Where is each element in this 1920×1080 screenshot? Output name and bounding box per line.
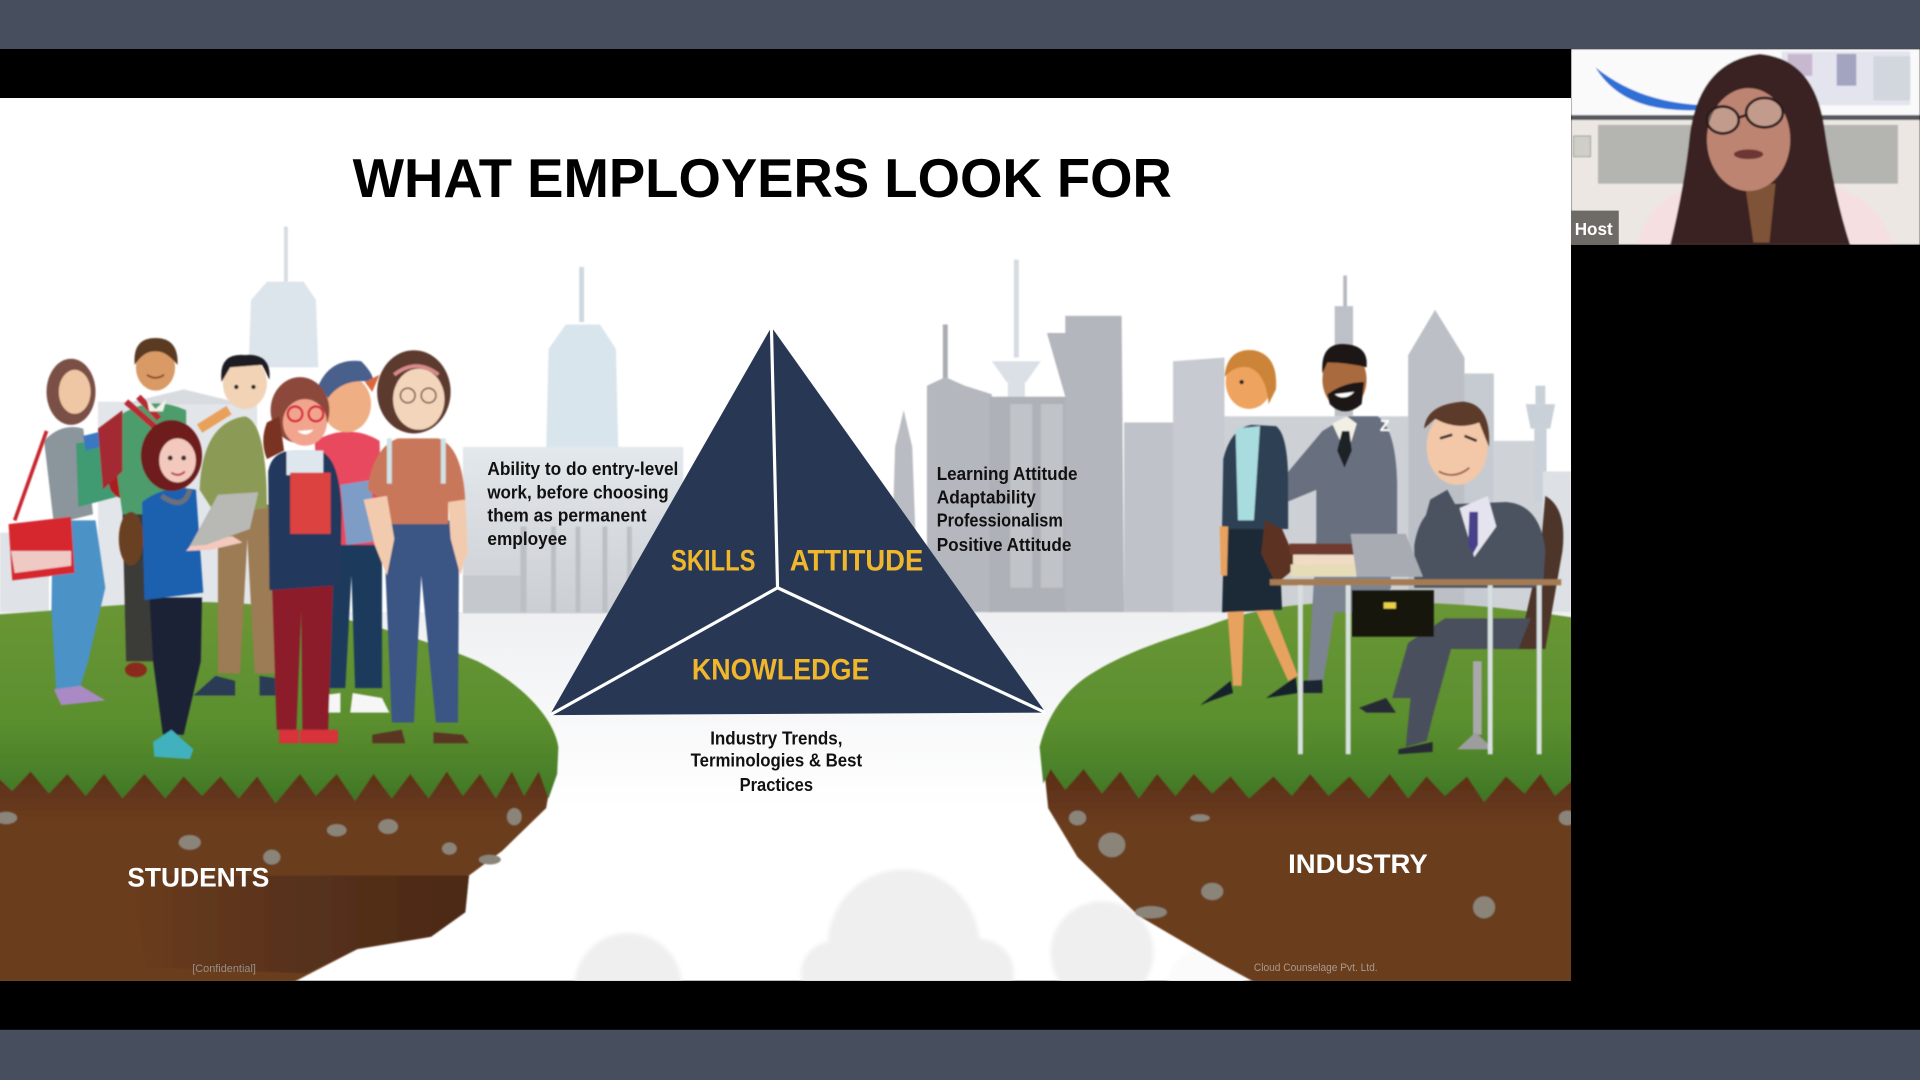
snore letters: Z: [1380, 418, 1390, 435]
triangle diagram: [550, 327, 1046, 715]
webcam panel: host: [1571, 49, 1920, 245]
label: skills: SKILLS: [671, 545, 756, 578]
student: boy in olive sweater: [193, 354, 276, 696]
soil left: [0, 770, 549, 981]
skyline left: [0, 227, 683, 613]
soil right: [1043, 759, 1580, 984]
worker: woman with handbag: [1200, 350, 1298, 705]
text: knowledge description: Industry Trends,: [710, 727, 842, 748]
student: girl with glasses and red trousers: [263, 377, 342, 743]
student: girl with red bag: [8, 358, 122, 706]
label: host: Host: [1575, 219, 1613, 239]
snore letters: [1380, 390, 1405, 435]
label: attitude: ATTITUDE: [790, 545, 923, 578]
text: attitude description: Positive Attitude: [937, 534, 1071, 555]
wall monitor: [1571, 49, 1920, 120]
student: boy in green shirt: [98, 338, 186, 677]
icon: laptop: [190, 492, 258, 546]
icon: briefcase: [1352, 590, 1434, 637]
icon: stack of books: [1289, 544, 1357, 577]
text: skills description: work, before choosing: [486, 481, 669, 502]
host mouth: [1734, 149, 1763, 159]
desk: [1270, 579, 1561, 754]
label: industry: INDUSTRY: [1288, 849, 1428, 879]
grass right: [1040, 602, 1580, 802]
text: attitude description: [937, 463, 1078, 555]
student: boy in cap: [315, 361, 389, 713]
text: skills description: [486, 458, 678, 549]
text: skills description: employee: [487, 528, 567, 549]
host glasses: [1707, 98, 1783, 133]
wall: [1571, 49, 1920, 245]
text: knowledge description: Terminologies & Best: [691, 750, 862, 771]
icon: laptop on desk: [1351, 534, 1423, 577]
island: industry: [1040, 602, 1580, 984]
student: girl in blue shirt: [119, 420, 242, 759]
snore letters: Z: [1393, 390, 1405, 411]
worker: seated man with head on hand: [1359, 402, 1563, 754]
footer: confidential: [Confidential]: [192, 963, 256, 975]
group of students: [9, 338, 469, 759]
text: knowledge description: [691, 727, 862, 795]
label: students: STUDENTS: [127, 863, 269, 893]
host neck: [1745, 184, 1776, 242]
triangle dividers: [550, 327, 1046, 715]
text: attitude description: Adaptability: [937, 486, 1037, 507]
text: skills description: them as permanent: [487, 505, 647, 526]
island: students: [0, 602, 558, 984]
text: knowledge description: Practices: [740, 774, 813, 795]
label: host: [1571, 211, 1619, 245]
label: knowledge: KNOWLEDGE: [692, 654, 869, 687]
host hair: [1670, 54, 1850, 245]
footer: company: Cloud Counselage Pvt. Ltd.: [1254, 962, 1378, 974]
group of office workers: [1200, 344, 1563, 754]
worker: bearded man in grey suit: [1287, 343, 1398, 694]
host sweater: [1637, 187, 1893, 245]
stones left: [0, 808, 522, 864]
grass left: [0, 602, 558, 803]
text: attitude description: Professionalism: [937, 510, 1063, 531]
skyline right: [890, 260, 1571, 612]
text: attitude description: Learning Attitude: [937, 463, 1078, 484]
stones right: [1069, 811, 1576, 918]
student: tall girl with bob hair: [364, 350, 469, 743]
wall socket: [1573, 136, 1591, 157]
host face: [1707, 88, 1790, 191]
text: skills description: Ability to do entry-level: [487, 458, 678, 479]
triangle body: [550, 327, 1046, 715]
title: WHAT EMPLOYERS LOOK FOR: [353, 147, 1172, 209]
slide panel: [0, 98, 1580, 1041]
background clouds: [572, 870, 1248, 981]
